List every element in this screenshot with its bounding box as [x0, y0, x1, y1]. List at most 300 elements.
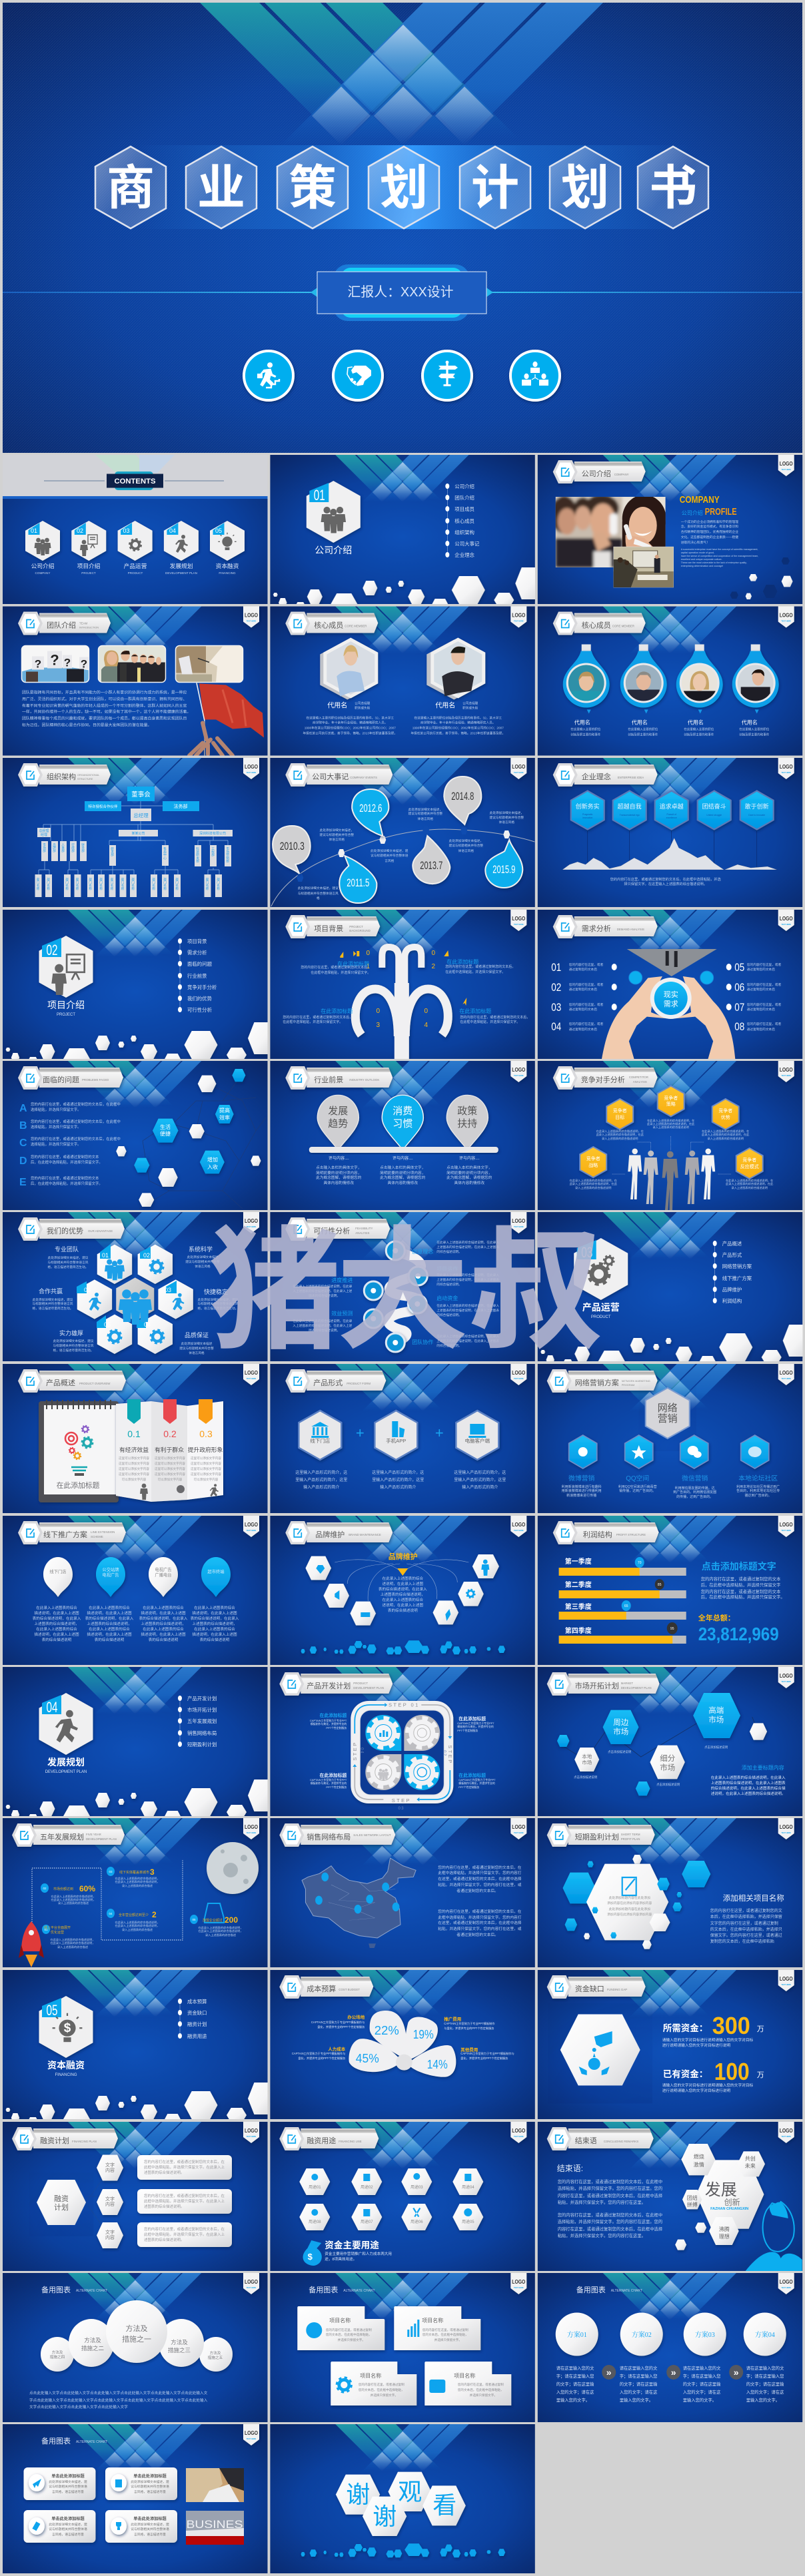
closing text: 粘贴，并选择只保留文字。您的内容打在这里。 [558, 2232, 646, 2238]
english text [681, 548, 758, 567]
org chart: 总经理 [39, 828, 49, 833]
card badges [29, 2474, 127, 2535]
event 2015.9 [485, 840, 522, 888]
option icons [340, 950, 466, 1006]
header tag [279, 1672, 393, 1696]
event 2012.6 [352, 789, 389, 836]
advantage texts: 格，语言描述尽量简洁生动。 [33, 1306, 73, 1311]
option lines: 这里可以添加文字内容 [191, 1456, 221, 1460]
plus signs [356, 1425, 444, 1441]
logo: TEXT HERE [781, 619, 791, 622]
english text: enterprising determination and courage! [681, 565, 723, 567]
logo: LOGO [512, 1521, 526, 1528]
promotion texts: 在此录入上述图表的综合 [194, 1626, 235, 1632]
problem letters: E [19, 1177, 27, 1188]
logo: LOGO [780, 2127, 793, 2134]
chart title [41, 2285, 107, 2294]
advantage texts: 格，语言描述尽量简洁生动。 [198, 1306, 238, 1311]
thank you characters [346, 2478, 456, 2530]
reporter box [311, 264, 493, 321]
flow ribbon [389, 1252, 421, 1343]
flow texts: 在此录入上述图表的综合描述说明，在此录入 [436, 1273, 499, 1277]
logo: TEXT HERE [514, 1377, 524, 1380]
flow texts [293, 1240, 499, 1348]
required funds value: 300 [712, 2012, 750, 2039]
promotion texts: 描述说明，在此录入上述图 [141, 1632, 186, 1637]
hexagon labels: 便捷 [160, 1130, 171, 1137]
general manager box: 总经理 [133, 812, 149, 818]
section list: 团队介绍 [454, 495, 474, 501]
hexagon labels: 入收 [207, 1163, 218, 1170]
five section hexagons: 资本融资 [216, 562, 239, 569]
quarter value bubbles [622, 1557, 678, 1634]
header tag: ORGANIZATIONAL [77, 774, 99, 777]
card texts: 此处添加详细文本描述，建 [131, 2522, 169, 2527]
milestone texts: 录入上述图表的综合描述 [122, 1927, 153, 1932]
logo: TEXT HERE [514, 923, 524, 926]
flow headings: 效益预测 [331, 1310, 353, 1317]
yellow hexagons: 竞争者 [613, 1108, 627, 1114]
milestone texts: 在此录入上述图表的综合描述说明， [50, 1937, 95, 1942]
demand circle: 需求 [664, 1000, 678, 1008]
fourth level boxes: 部门名称 [89, 877, 92, 891]
advantage texts: 体语言风格 [195, 1264, 211, 1269]
project text: 保留文字。您的内容打在这里，或者通过 [710, 1933, 782, 1938]
development words: FAZHAN CHUANGXIN [710, 2207, 748, 2211]
option texts: 在此框中选择粘贴，并选择只保留文字。 [445, 970, 505, 974]
demand circle: 现实 [664, 990, 678, 999]
required funds text: 请输入您的文字对目标进行说明请输入您的文字对目标 [662, 2037, 754, 2043]
red flag with raised hands [189, 683, 264, 755]
section number: 01 [314, 487, 325, 503]
step texts: 模板制作与美化，并提供专业的 [458, 1781, 495, 1785]
logo [510, 1061, 526, 1082]
logo: LOGO [245, 2278, 258, 2285]
pin texts: 点击输入本栏的具体文字， [316, 1165, 361, 1170]
idea description: 择只保留文字。在这里输入上述图表的综合描述说明。 [624, 881, 707, 886]
header tag [547, 1975, 646, 1999]
network text 2: 此框中选择粘贴，并选择只保留文字。您的内容打 [438, 1915, 522, 1920]
arrow circles: » [671, 2367, 676, 2378]
header tag: PROBLEMS FACED [82, 1078, 109, 1082]
required funds text [662, 2037, 754, 2048]
pin captions: 评与内容.... [459, 1155, 480, 1161]
development words: 拼搏 [687, 2201, 698, 2208]
yellow hexagons: 竞争者 [742, 1157, 756, 1163]
five section hexagons: 05 [215, 527, 222, 534]
five value hexagons: Pragmatic [582, 813, 593, 816]
event descriptions: 此处添加详细文本描述， [408, 807, 442, 812]
flow texts: 在此录入上述图表的综合描述说明，在此录 [293, 1319, 353, 1323]
overlapping circles: 措施之四 [50, 2354, 65, 2360]
fourth level boxes: 部门名称 [75, 877, 79, 891]
header tag: 线下推广方案 [43, 1530, 87, 1539]
cost labels: 其他费用 [460, 2047, 478, 2053]
card headings: 单击此处添加标题 [133, 2473, 167, 2479]
advantage texts: 建议与标题相关并符合整 [185, 1259, 220, 1264]
hands holding circle [602, 976, 735, 1059]
silhouettes of people [628, 1149, 715, 1210]
event descriptions: 体语言风格 [458, 848, 474, 853]
logo [510, 1516, 526, 1537]
yellow hexagons: 策略 [666, 1101, 676, 1107]
header tag [547, 1369, 658, 1393]
four balloon pins: 超市终端 [207, 1568, 225, 1574]
existing funds text [662, 2083, 754, 2093]
icon: phone [392, 1421, 404, 1437]
header tag: COST BUDGET [339, 1988, 360, 1991]
channel titles: QQ空间 [626, 1474, 649, 1482]
advantage texts: 此处添加详细文本描述，建议 [53, 1339, 94, 1343]
fourth level boxes: 部门名称 [36, 877, 40, 891]
three pins [317, 1095, 488, 1150]
event descriptions: 言风格 [385, 858, 395, 863]
development words: 燃烧 [694, 2153, 704, 2160]
promotion texts: 表的综合描述说明，在此录入 [191, 1616, 239, 1621]
logo: LOGO [245, 1369, 258, 1376]
promotion texts: 描述说明，在此录入上述图 [192, 1610, 237, 1616]
problem letters: C [19, 1137, 27, 1149]
form texts: 输入产品形式的简介 [380, 1484, 416, 1490]
three small hexagons: 文字 [105, 2229, 115, 2235]
advantage labels: 合作共赢 [39, 1287, 63, 1295]
member text: 创始及职主要的和事件 [739, 733, 770, 737]
flow texts: 的综合描述说明。 [436, 1282, 462, 1287]
numbered list right: 05 [734, 961, 744, 974]
profile text [681, 519, 738, 545]
rocket [19, 1921, 44, 1967]
plan circles [556, 2312, 786, 2356]
step texts: CAPTAIN工作室致力于专业PPT [310, 1719, 347, 1722]
eight use hexagons: 用途06 [410, 2219, 423, 2224]
main hexagon [646, 1388, 690, 1439]
market labels: 高端 [708, 1706, 724, 1715]
five section hexagons: 01 [31, 527, 37, 534]
network text 1 [438, 1865, 522, 1893]
five section hexagons: FINANCING [219, 571, 236, 575]
brand hexagons [305, 1554, 499, 1626]
form texts: 这里输入产品形式的简介，这 [454, 1470, 506, 1475]
section number: 02 [47, 942, 57, 958]
logo [510, 606, 526, 627]
numbered list right: 通过复制您的文本后 [747, 1027, 775, 1032]
step headings [320, 1712, 347, 1778]
header tag [18, 763, 111, 787]
fourth level boxes: 部门名称 [99, 877, 103, 891]
promotion texts: 描述说明，在此录入上述图 [87, 1610, 132, 1616]
member 2 text: 1990年在某公司担任经理的COO；2002年任某公司的COO；2007 [412, 726, 504, 730]
option titles: 提升政府形象 [188, 1446, 223, 1453]
competitor texts: 在此录入上述图表的综合描述说明，在 [596, 1129, 644, 1133]
plan circles: 方案04 [755, 2330, 775, 2339]
header tag: LINE EXTENSION [91, 1530, 115, 1534]
team text: 团队精神尊重每个成员的兴趣和成就，要求团队的每一个成员，都以提高自身素质和实现团队目 [22, 715, 187, 721]
milestone numbers: 60% [79, 1884, 95, 1893]
annual total number: 23,812,969 [698, 1624, 779, 1644]
section title: 产品运营 [582, 1302, 620, 1313]
photo: office [175, 646, 243, 682]
header tag: 品牌维护 [315, 1530, 345, 1539]
logo: LOGO [780, 1066, 793, 1073]
funding use text [325, 2251, 392, 2262]
option lines: 可以添加文字内容 [194, 1477, 219, 1482]
cost texts: 与盘化，并提供专业的PPT个性定制服务 [444, 2026, 494, 2031]
pin captions: 评与内容.... [329, 1155, 349, 1161]
five section hexagons: 项目介绍 [77, 562, 101, 569]
header tag: DEVELOPMENT PLAN [621, 1686, 651, 1690]
option headings: 在此添加标题 [321, 1008, 353, 1014]
card texts: 言风格，语言描述尽量 [134, 2489, 166, 2494]
header tag: COMPETITOR [629, 1076, 648, 1079]
header tag: FUNDING GAP [607, 1988, 627, 1991]
logo [778, 1667, 794, 1688]
logo [243, 2273, 259, 2294]
section subtitle: PROJECT [57, 1013, 75, 1017]
development words: 沸腾 [719, 2226, 730, 2232]
promotion texts: 在此录入上述图表的综合 [143, 1605, 184, 1610]
logo: TEXT HERE [514, 1074, 524, 1077]
profile text: 念，良好的资金运作模式，有竞争意识和 [681, 524, 738, 529]
numbered list right: 06 [734, 981, 744, 994]
numbered list left: 02 [551, 981, 561, 994]
connector lines [564, 1717, 758, 1793]
step labels: STEP [392, 1797, 411, 1803]
three text cards: 您的内容打在这里，或者通过复制您的文本后，在 [144, 2159, 225, 2164]
option titles: 有利于群众 [155, 1446, 184, 1453]
header tag: DEVELOPMENT PLAN [86, 1837, 117, 1841]
option texts [283, 964, 530, 1024]
board box [127, 787, 155, 801]
option numbers: 4 [424, 1022, 428, 1029]
card headings: 项目名称 [422, 2317, 443, 2324]
advantage texts: 格，语言描述尽量简洁生动。 [53, 1348, 93, 1353]
five value hexagons: 创新务实 [576, 803, 600, 810]
option lines: 这里可以添加文字内容 [191, 1461, 221, 1466]
member text: 在这里输入主要的职位 [628, 727, 658, 731]
cost labels: 办公场地 [347, 2014, 365, 2020]
market captions [574, 1745, 728, 1787]
cost texts: 盘化，并提供专业的PPT个性定制服务 [460, 2056, 508, 2061]
channel texts: 到广告目的。利用微信朋友圈 [673, 1490, 716, 1494]
header tag: MARKET [621, 1682, 633, 1685]
plan texts: 入您的文字；请在这 [556, 2389, 594, 2395]
event descriptions: 体语言风格 [499, 820, 514, 824]
hexagon labels: 生活 [160, 1124, 171, 1130]
demand circle [650, 978, 692, 1019]
section number: 04 [47, 1699, 57, 1716]
numbered list right: 您的内容打在这里，或者 [747, 1022, 782, 1026]
yellow pointer [397, 1568, 408, 1576]
logo: LOGO [780, 1672, 793, 1679]
section list [178, 938, 217, 1013]
five value hexagons: Dare to innovate [748, 814, 765, 816]
promotion texts: 描述说明，在此录入上述图 [87, 1632, 132, 1637]
plan texts: 请在这里输入您的文 [746, 2365, 784, 2371]
section list: 需求分析 [187, 950, 207, 956]
section list: 面临的问题 [187, 961, 213, 967]
member 2 name [435, 701, 478, 710]
header tag: INDUSTRY OUTLOOK [349, 1078, 379, 1082]
chart title: ALTERNATE CHART [76, 2440, 107, 2444]
header tag: 公司介绍 [582, 469, 611, 478]
panel: our advantage [3, 1212, 268, 1361]
member text [570, 727, 770, 737]
card headings [329, 2317, 475, 2379]
milestone headlines: 优化运营 [51, 1930, 64, 1935]
eight use hexagons: 用途07 [361, 2219, 373, 2224]
title hexagon letters: 商业策划计划书 [107, 162, 697, 215]
form texts: 输入产品形式的简介 [462, 1484, 498, 1490]
option lines: 这里可以添加文字内容 [191, 1466, 221, 1471]
flow texts: 上述图表的综合描述说明，在此录入上述图表 [436, 1245, 499, 1249]
panel: product development plan [270, 1667, 535, 1816]
pin captions [329, 1155, 480, 1161]
card headings: 单击此处添加标题 [51, 2516, 85, 2521]
card texts: 此处添加详细文本描述，建 [49, 2479, 87, 2484]
honeycomb: 01 [102, 1252, 109, 1259]
problem letters: A [19, 1103, 27, 1114]
step texts: CAPTAIN工作室致力于专业PPT [310, 1778, 347, 1781]
header tag [18, 1217, 125, 1241]
funding use heading: 资金主要用途 [325, 2240, 379, 2250]
header tag: FEASIBILITY [355, 1227, 373, 1230]
network text 1: 粘贴，并选择只保留文字。您的内容打在这里，或 [438, 1882, 522, 1887]
development words: 未来 [745, 2162, 756, 2169]
team text: 标为己任。团队精神的核心是合作协同，目的是最大发挥团队的潜在能量。 [22, 722, 151, 727]
step side numbers: 03 [398, 1807, 404, 1811]
org chart: 经理 [41, 832, 47, 837]
network text 1: 您的内容打在这里，或者通过复制您的文本后，在 [438, 1865, 522, 1870]
card texts: 此处添加详细文本描述，建 [131, 2479, 169, 2484]
promotion texts [33, 1605, 239, 1642]
logo [243, 1516, 259, 1537]
member text: 创始及职主要的和事件 [628, 733, 658, 737]
brand text: 述说明，在此录入上述图 [383, 1581, 423, 1586]
member 2 text: 年担任某公司执行总裁，善于领导，策略。2013年任职该董事及职。 [410, 731, 505, 735]
section list [713, 1241, 752, 1304]
reporter divider line [3, 292, 802, 293]
milestone headlines [44, 1870, 223, 1935]
blue hexagon row [301, 1640, 505, 1654]
option numbers [367, 950, 436, 1029]
photo: question marks: ? [35, 658, 41, 670]
member badge 2 [620, 645, 667, 707]
logo [243, 1364, 259, 1385]
milestone circles [41, 1867, 198, 1934]
section list: 五年发展规划 [187, 1718, 217, 1724]
step labels: STEP [447, 1745, 453, 1765]
header tag: PRODUCT FORM [347, 1382, 371, 1385]
section list: 公司大事记 [454, 541, 480, 547]
problem texts [31, 1102, 121, 1186]
development words [687, 2153, 756, 2240]
quarter labels: 第一季度 [565, 1557, 592, 1566]
overlapping circles: 方法及 [52, 2350, 63, 2355]
numbered list right [726, 961, 782, 1033]
numbered list left: 您的内容打在这里，或者 [569, 1002, 604, 1007]
logo: LOGO [245, 1823, 258, 1830]
four balloon pins: 线下门店 [49, 1568, 67, 1574]
advantage texts [33, 1255, 239, 1355]
gear inner icons [375, 1725, 430, 1781]
title band [136, 145, 689, 229]
header tag: TEAM [79, 622, 88, 625]
section list: 产品形式 [722, 1252, 742, 1258]
section list: 资金缺口 [187, 2010, 207, 2016]
five value hexagons: United struggle [706, 814, 722, 816]
section list: 项目成员 [454, 506, 474, 512]
eight use hexagons: 用途03 [410, 2184, 423, 2190]
event 2013.7 [412, 836, 450, 884]
problem texts: 您的内容打在这里，或者通过复制您的文本后，在此框中 [31, 1119, 121, 1124]
event 2011.5: 2011.5 [347, 876, 369, 889]
header tag [285, 763, 393, 787]
market heading: 添加主要标题内容 [742, 1764, 784, 1771]
four balloon pins: 广播电台 [155, 1572, 172, 1578]
channel texts: 新浪微博来进行传播 [566, 1493, 596, 1498]
logo: LOGO [512, 1066, 526, 1073]
step headings: 在此添加标题 [320, 1772, 347, 1778]
eight use hexagons: 用途04 [462, 2184, 474, 2190]
existing funds label: 已有资金： [663, 2069, 708, 2079]
pin texts: 点击输入本栏的具体文字， [380, 1165, 425, 1170]
section list: 利润结构 [722, 1298, 742, 1304]
panel: contents [3, 455, 268, 604]
header tag [285, 1217, 390, 1241]
section subtitle: FINANCING [55, 2073, 77, 2077]
existing funds text: 请输入您的文字对目标进行说明请输入您的文字对目标 [662, 2083, 754, 2088]
timeline markers [297, 826, 510, 882]
brand text: 上述图表的综合描述说明， [381, 1592, 425, 1597]
market captions: 点击添加描述说明 [608, 1750, 632, 1754]
milestone texts: 在此录入上述图表的综合描述说明， [198, 1925, 243, 1930]
quarterly bars [559, 1557, 686, 1644]
logo: TEXT HERE [781, 923, 791, 926]
fourth level boxes: 部门名称 [205, 877, 209, 891]
header tag: SHORT TERM [621, 1833, 640, 1836]
competitor texts: 在此录入上述图表的综合描述说明，在 [570, 1178, 617, 1183]
plan texts: 字；请在这里输入您 [683, 2373, 720, 2379]
logo: LOGO [512, 1369, 526, 1376]
plan circles: 方案03 [695, 2330, 715, 2339]
milestone numbers [79, 1867, 238, 1925]
problem letters: D [19, 1155, 27, 1167]
section title: 公司介绍 [315, 545, 352, 555]
three small hexagons: 文字 [105, 2196, 115, 2202]
option lines: 这里可以添加文字内容 [119, 1456, 149, 1460]
three small hexagons: 内容 [105, 2234, 115, 2240]
card texts: 言风格，语言描述尽量 [134, 2532, 166, 2537]
flow texts: 上述图表的综合描述说明，在此录入上述图表 [436, 1308, 499, 1313]
header tag: 公司大事记 [312, 772, 349, 781]
panel: sales network [270, 1818, 535, 1967]
chart text: 文字点击此处输入文字点击此处输入文字点击此处输入文字 [29, 2404, 128, 2410]
member 1 portrait [320, 638, 378, 699]
header tag [18, 611, 111, 635]
panel: financing plan [3, 2122, 268, 2271]
plan texts: 入您的文字；请在这 [746, 2389, 784, 2395]
step texts: CAPTAIN工作室致力于专业PPT [458, 1778, 496, 1781]
team text: 用广泛、灵活的组织形式。对于大学生创业团队，可以说由一群具有创新意识、拥有共同目标、 [22, 697, 187, 702]
header tag [547, 1672, 660, 1696]
chart title [41, 2436, 107, 2445]
chart title: 备用图表 [41, 2285, 71, 2294]
card texts: 议与标题相关并符合整体语 [49, 2484, 87, 2489]
channel texts: 告目的，利用本地论坛社区传 [736, 1488, 780, 1493]
advantage texts: 与标题相关并符合整体语言风 [33, 1301, 73, 1306]
thank you characters: 观 [398, 2478, 422, 2505]
icon: org chart [522, 362, 548, 386]
